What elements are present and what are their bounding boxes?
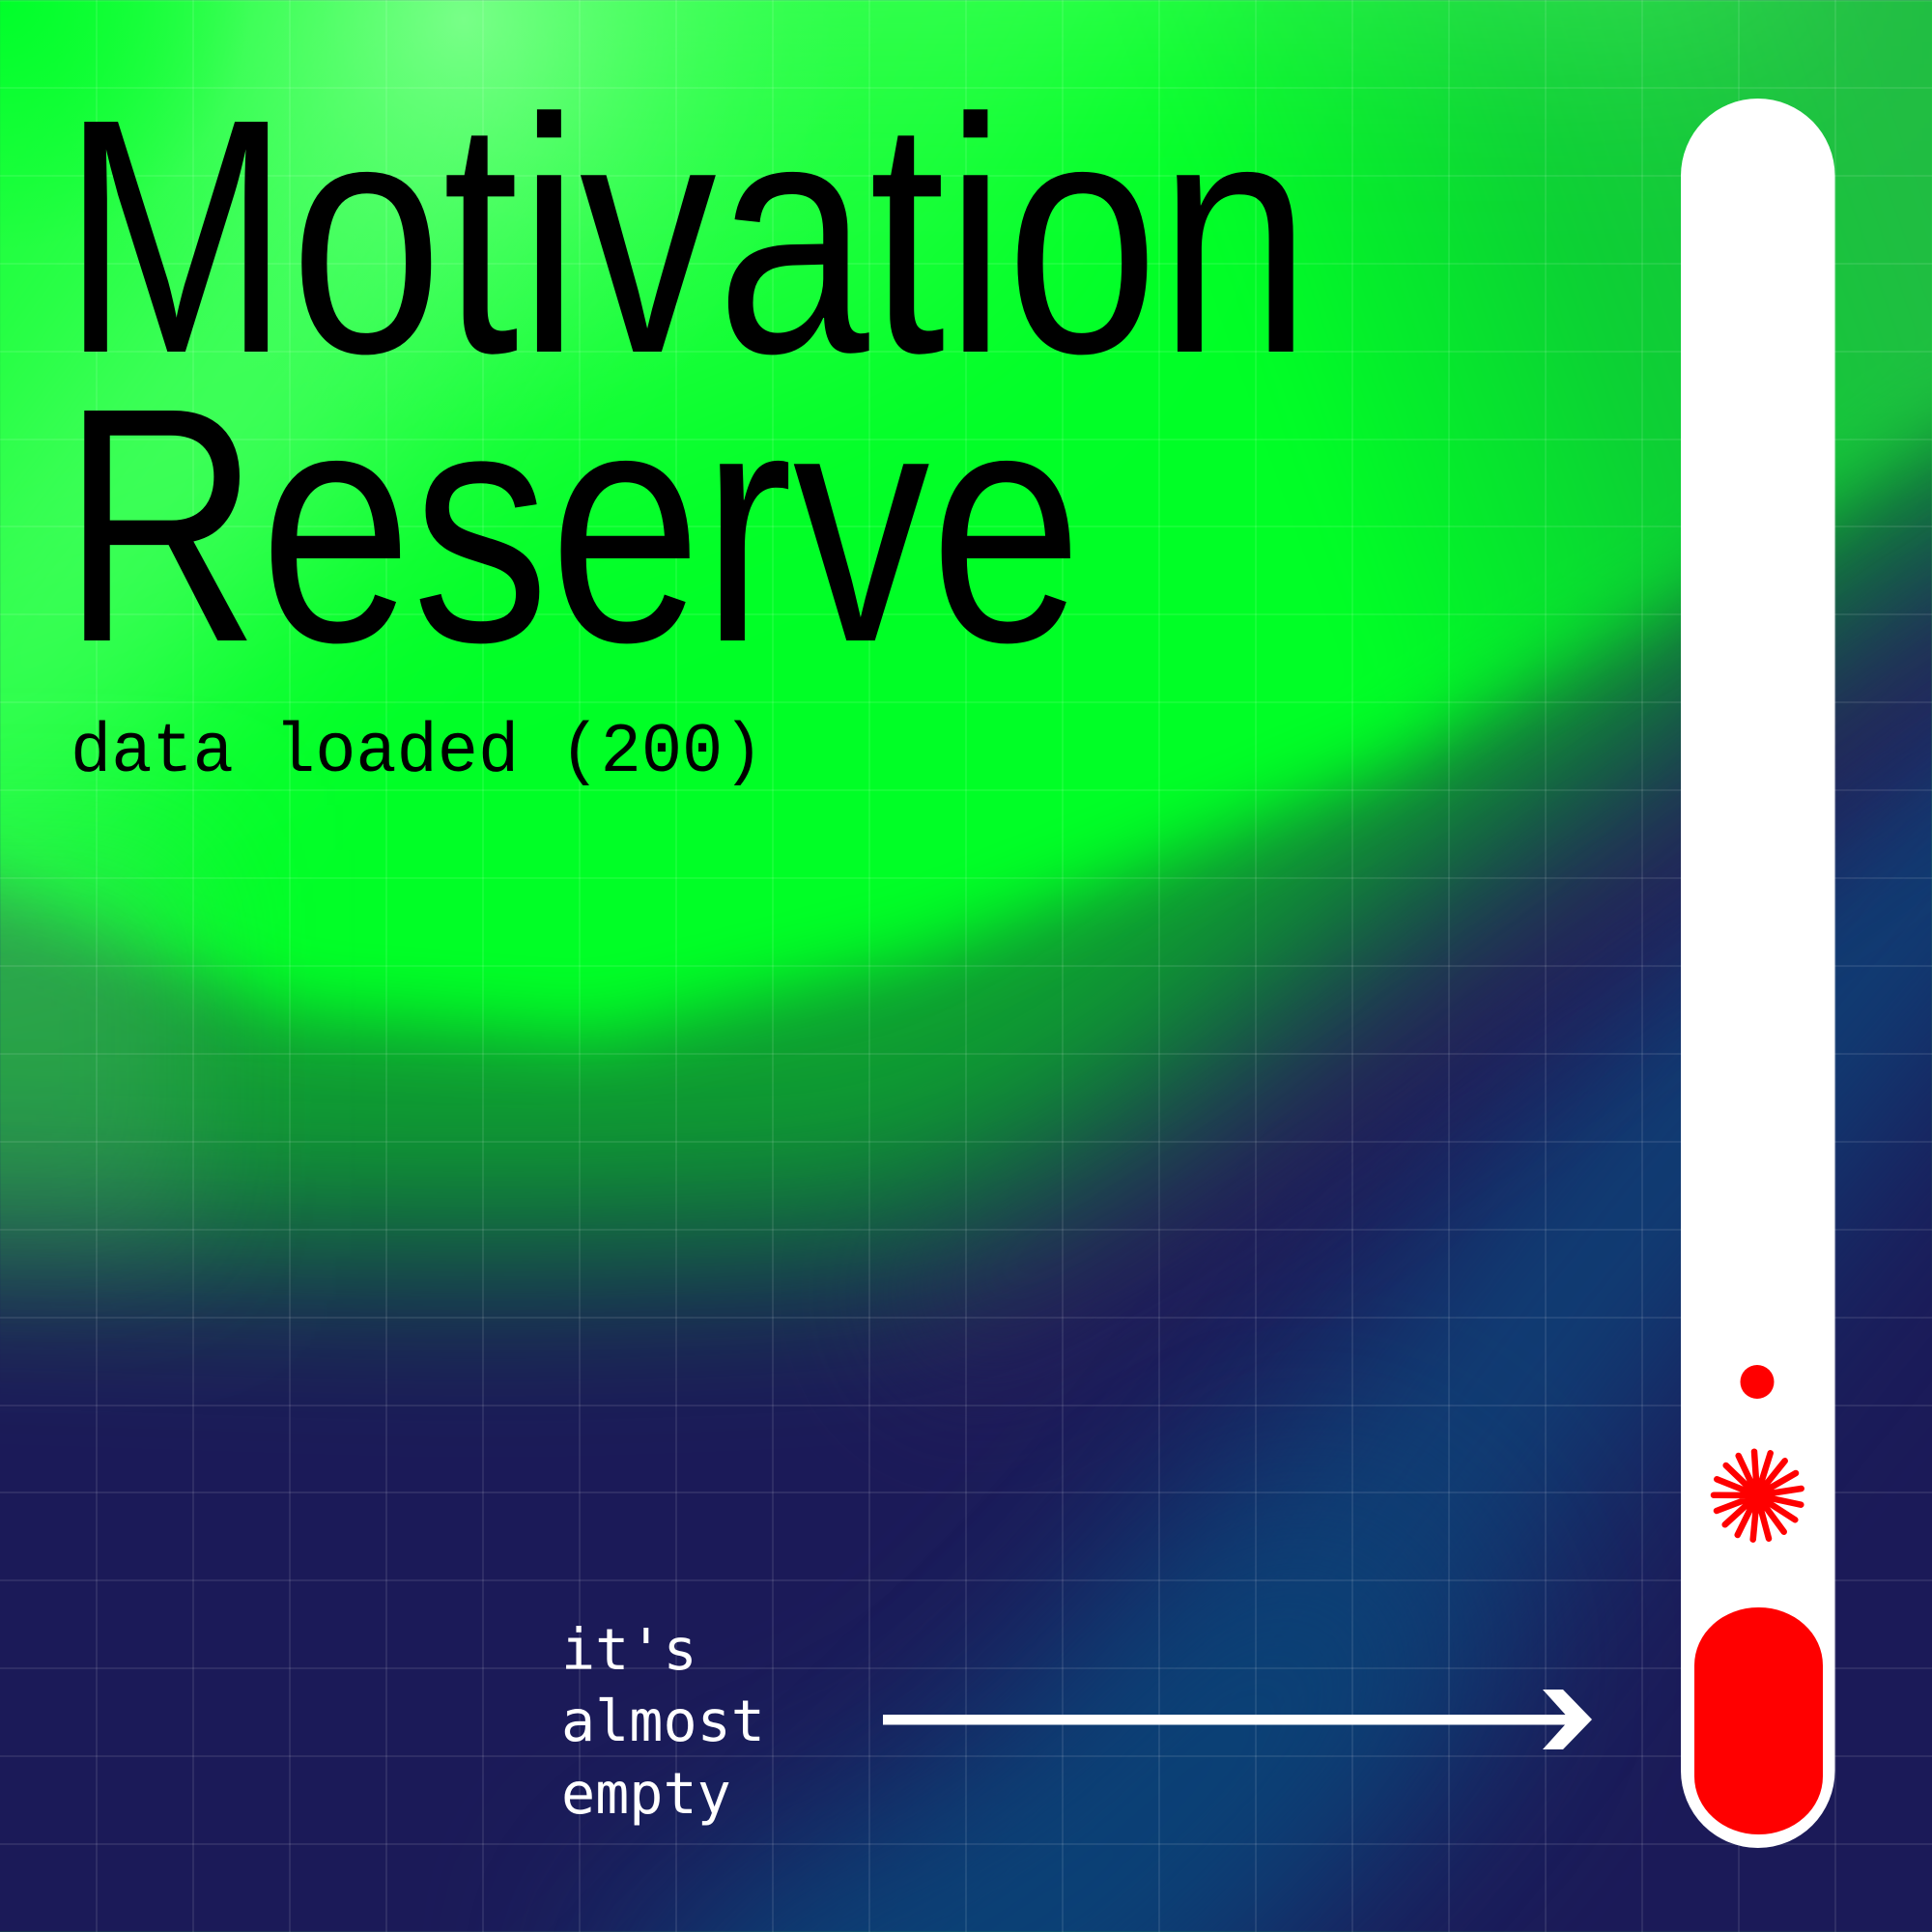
gauge red level fill <box>1694 1607 1823 1834</box>
annotation line 3: empty <box>561 1761 731 1827</box>
gauge tube <box>1681 99 1835 1848</box>
subtitle: status: data loaded (200) <box>71 714 763 792</box>
annotation text <box>561 1617 765 1827</box>
arrow pointing to gauge <box>883 1690 1592 1749</box>
annotation line 2: almost <box>561 1689 765 1754</box>
icon: red starburst <box>1714 1452 1802 1540</box>
thermometer gauge <box>1681 99 1835 1848</box>
icon: red dot <box>1741 1365 1774 1399</box>
title <box>62 50 1311 712</box>
annotation line 1: it's <box>561 1617 697 1683</box>
title line 2: Reserve <box>62 339 1082 712</box>
title line 1: Motivation <box>62 50 1311 423</box>
